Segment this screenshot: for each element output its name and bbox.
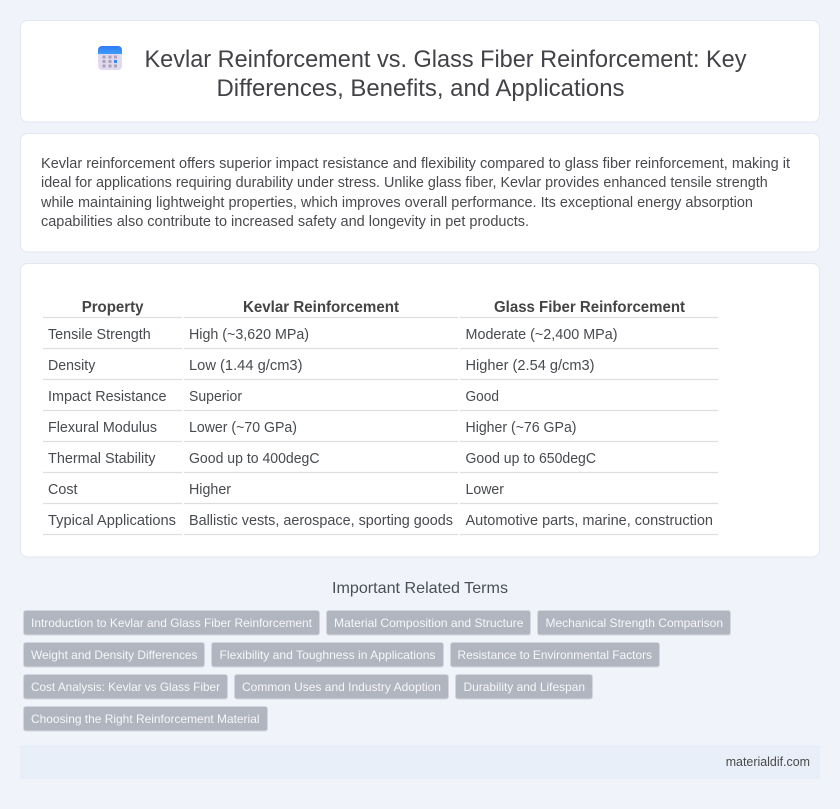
tag: Material Composition and Structure: [334, 616, 524, 630]
row: thermal stability: [48, 451, 596, 467]
row: tensile strength: High (~3,620 MPa): [189, 327, 309, 343]
table header row: Glass Fiber Reinforcement: [494, 299, 685, 316]
tag: [538, 610, 730, 635]
tag: [450, 642, 660, 667]
row: density: Higher (2.54 g/cm3): [466, 358, 594, 374]
row: typical applications: [48, 513, 713, 529]
title: Kevlar Reinforcement vs. Glass Fiber Reinforcement: Key: [144, 46, 746, 73]
row: density: [48, 358, 594, 374]
intro text block: capabilities also contribute to increased safety and longevity in pet products.: [41, 214, 529, 230]
tag: [24, 610, 320, 635]
row: cost: [48, 482, 504, 498]
tag: [24, 642, 204, 667]
tag: Mechanical Strength Comparison: [546, 616, 723, 630]
tag: [326, 610, 530, 635]
table header row: Kevlar Reinforcement: [243, 299, 399, 316]
row: flexural modulus: [48, 420, 576, 436]
footer bar: materialdif.com: [726, 755, 810, 769]
panel: comparison table: [20, 264, 820, 557]
tag: [234, 674, 448, 699]
intro text block: [40, 156, 790, 230]
table header row: Property: [82, 299, 144, 316]
icon: calendar grid: [98, 46, 122, 70]
row: typical applications: Automotive parts, marine, construction: [466, 513, 713, 529]
tag: Resistance to Environmental Factors: [458, 648, 652, 662]
title: [144, 46, 746, 102]
row: tensile strength: Moderate (~2,400 MPa): [466, 327, 618, 343]
row: impact resistance: Superior: [189, 389, 242, 405]
row: density: Low (1.44 g/cm3): [189, 358, 302, 374]
row: cost: Cost: [48, 482, 78, 498]
row: typical applications: Ballistic vests, aerospace, sporting goods: [189, 513, 453, 529]
row: typical applications: Typical Applications: [48, 513, 176, 529]
tag: Flexibility and Toughness in Applications: [220, 648, 436, 662]
row: tensile strength: Tensile Strength: [48, 327, 151, 343]
table header row: [82, 299, 685, 316]
row: impact resistance: Good: [466, 389, 499, 405]
heading: important related terms: Important Related Terms: [332, 580, 508, 597]
tag: Choosing the Right Reinforcement Material: [31, 712, 260, 726]
row: flexural modulus: Higher (~76 GPa): [466, 420, 576, 436]
tag: [212, 642, 444, 667]
row: impact resistance: Impact Resistance: [48, 389, 166, 405]
panel: title card: [20, 20, 820, 122]
tag: Introduction to Kevlar and Glass Fiber Reinforcement: [31, 616, 313, 630]
row: flexural modulus: Flexural Modulus: [48, 420, 157, 436]
row: cost: Higher: [189, 482, 231, 498]
row: tensile strength: [48, 327, 618, 343]
footer bar: [20, 745, 820, 779]
intro text block: Kevlar reinforcement offers superior impact resistance and flexibility compared to glass fiber reinforcement, making it: [41, 156, 790, 172]
row: thermal stability: Good up to 650degC: [466, 451, 596, 467]
intro text block: while maintaining lightweight properties, which improves overall performance. Its exceptional energy absorption: [40, 195, 753, 211]
panel: introduction: [20, 134, 820, 252]
tag: Weight and Density Differences: [31, 648, 198, 662]
row: thermal stability: Good up to 400degC: [189, 451, 320, 467]
tag: Durability and Lifespan: [464, 680, 585, 694]
tag: [24, 674, 228, 699]
title: Differences, Benefits, and Applications: [216, 75, 624, 102]
row: cost: Lower: [466, 482, 504, 498]
related terms tag list: [24, 610, 730, 731]
tag: Common Uses and Industry Adoption: [242, 680, 441, 694]
row: thermal stability: Thermal Stability: [48, 451, 156, 467]
row: impact resistance: [48, 389, 499, 405]
row: flexural modulus: Lower (~70 GPa): [189, 420, 297, 436]
tag: Cost Analysis: Kevlar vs Glass Fiber: [31, 680, 220, 694]
tag: [24, 706, 268, 731]
row: density: Density: [48, 358, 96, 374]
tag: [456, 674, 592, 699]
intro text block: ideal for applications requiring durability under stress. Unlike glass fiber, Kevlar provides enhanced tensile strength: [41, 175, 768, 191]
